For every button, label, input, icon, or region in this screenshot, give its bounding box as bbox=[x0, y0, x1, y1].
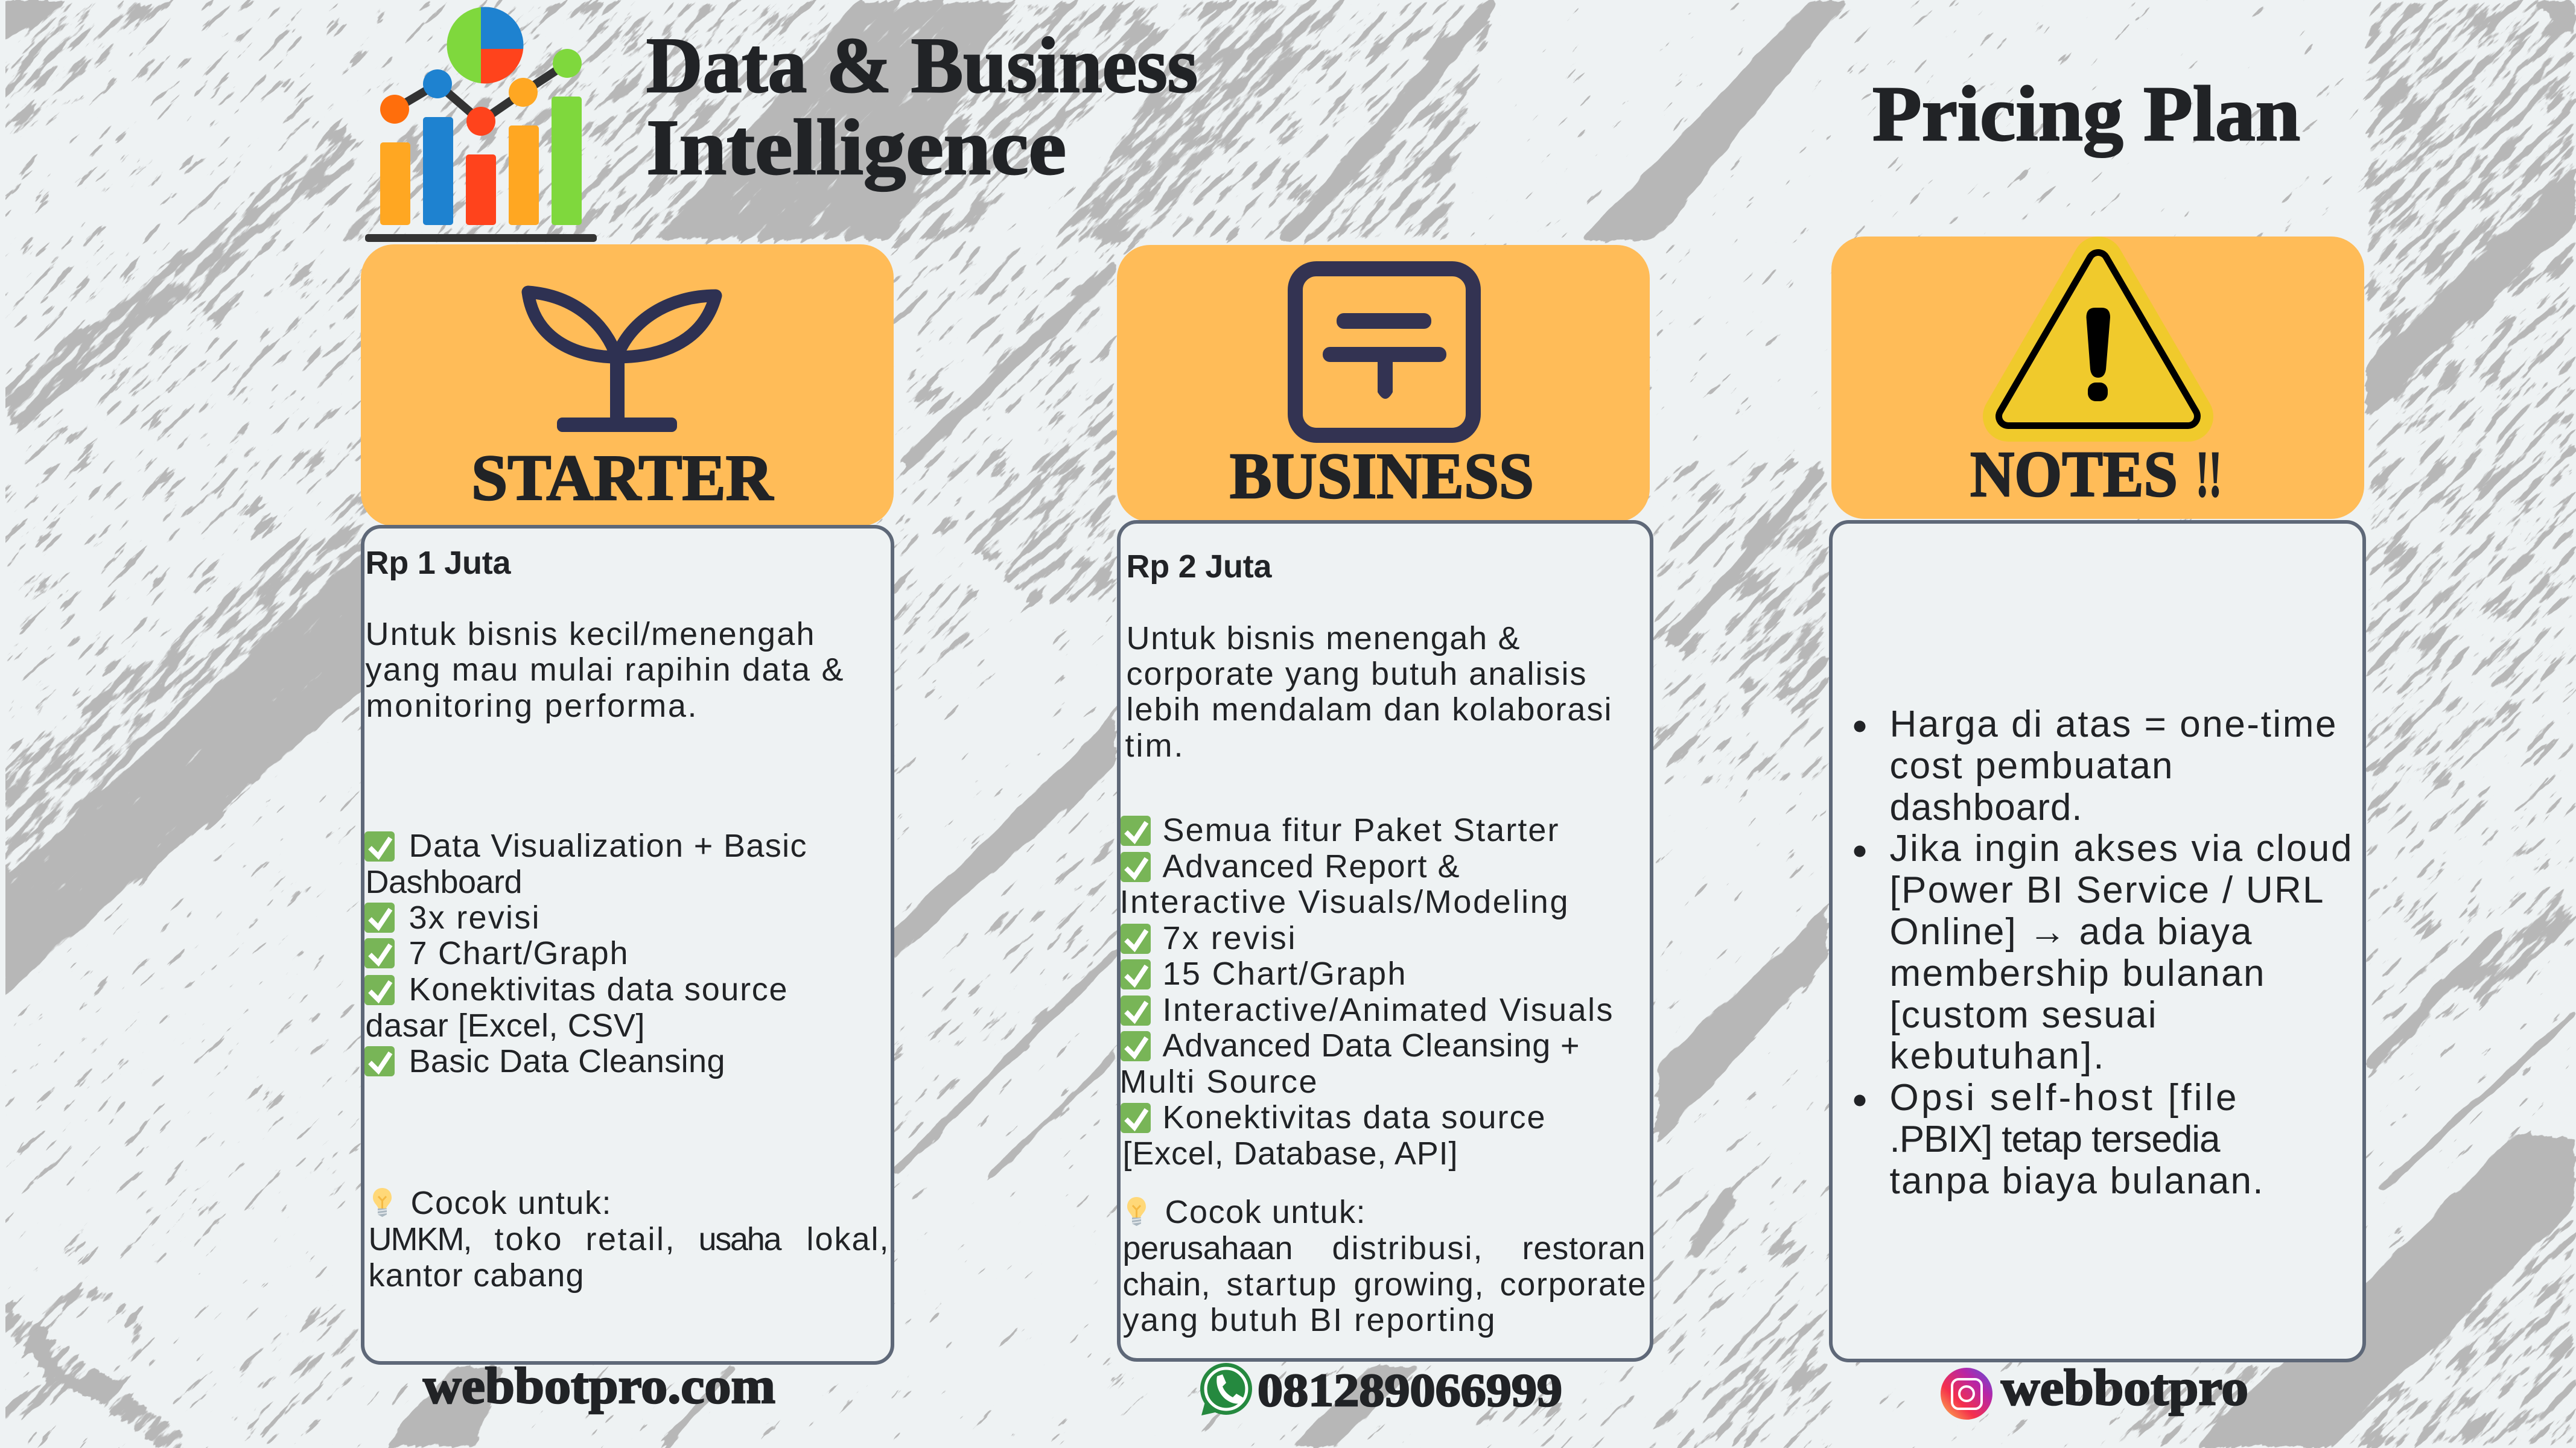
notes body card bbox=[1831, 522, 2364, 1361]
business description: Untuk bisnis menengah & bbox=[1126, 620, 1519, 656]
notes bullet list: cost pembuatan bbox=[1890, 745, 2172, 787]
business heading: BUSINESS bbox=[1230, 440, 1534, 512]
starter price: Rp 1 Juta bbox=[366, 545, 511, 581]
title bbox=[646, 22, 1198, 191]
notes heading: !! bbox=[2196, 439, 2222, 510]
business feature list: Interactive Visuals/Modeling bbox=[1120, 884, 1568, 920]
starter heading: STARTER bbox=[471, 442, 774, 514]
business feature list: Interactive/Animated Visuals bbox=[1162, 992, 1612, 1028]
notes bullet list: Opsi self-host [file bbox=[1890, 1077, 2236, 1119]
starter feature list: dasar [Excel, CSV] bbox=[366, 1008, 644, 1044]
business target audience: chain, bbox=[1122, 1266, 1210, 1303]
business feature list: Advanced Data Cleansing + bbox=[1162, 1027, 1580, 1064]
notes bullet list: [Power BI Service / URL bbox=[1890, 869, 2323, 911]
starter target audience: UMKM, bbox=[368, 1221, 472, 1257]
business feature list: Multi Source bbox=[1120, 1064, 1317, 1100]
business feature list: Semua fitur Paket Starter bbox=[1162, 812, 1559, 848]
starter description: Untuk bisnis kecil/menengah bbox=[366, 616, 815, 652]
notes bullet list: [custom sesuai bbox=[1890, 994, 2157, 1036]
starter description bbox=[366, 616, 844, 724]
footer: website: webbotpro.com bbox=[423, 1358, 775, 1414]
starter target audience bbox=[368, 1185, 888, 1294]
business feature list: Konektivitas data source bbox=[1162, 1099, 1545, 1135]
icon: warning triangle bbox=[2008, 262, 2188, 416]
title: Intelligence bbox=[646, 104, 1066, 191]
business description: corporate yang butuh analisis bbox=[1126, 656, 1586, 692]
notes bullet list: Harga di atas = one-time bbox=[1890, 703, 2336, 745]
icon: instagram bbox=[1941, 1368, 1992, 1420]
starter description: monitoring performa. bbox=[366, 688, 696, 724]
starter feature list: Dashboard bbox=[366, 864, 523, 900]
business description bbox=[1125, 620, 1611, 764]
icon: square with bars bbox=[1295, 269, 1474, 436]
heading: pricing plan: Pricing Plan bbox=[1872, 71, 2300, 157]
icon: sprout bbox=[528, 292, 716, 432]
notes bullet list: .PBIX] tetap tersedia bbox=[1890, 1119, 2221, 1160]
business feature list: [Excel, Database, API] bbox=[1122, 1135, 1458, 1172]
starter feature list bbox=[364, 828, 806, 1079]
notes bullet list: membership bulanan bbox=[1890, 953, 2264, 994]
starter target audience: lokal, bbox=[806, 1221, 888, 1257]
starter description: yang mau mulai rapihin data & bbox=[366, 652, 844, 688]
footer: whatsapp bbox=[1200, 1363, 1562, 1416]
business target audience: distribusi, bbox=[1332, 1230, 1482, 1266]
icon: whatsapp bbox=[1200, 1363, 1252, 1415]
business body card bbox=[1119, 522, 1652, 1360]
business price: Rp 2 Juta bbox=[1126, 548, 1272, 585]
panel: business bbox=[1117, 245, 1652, 1360]
business description: lebih mendalam dan kolaborasi bbox=[1126, 691, 1611, 728]
business target audience: restoran bbox=[1522, 1230, 1645, 1266]
logo: bar and line chart with pie bbox=[365, 0, 597, 242]
starter feature list: Konektivitas data source bbox=[409, 971, 787, 1008]
starter feature list: Basic Data Cleansing bbox=[409, 1043, 725, 1079]
instagram handle: webbotpro bbox=[2001, 1359, 2248, 1416]
notes bullet list bbox=[1854, 703, 2352, 1202]
business target audience: growing, bbox=[1354, 1266, 1483, 1303]
whatsapp number: 081289066999 bbox=[1258, 1364, 1562, 1416]
business feature list: 15 Chart/Graph bbox=[1162, 956, 1406, 992]
starter target audience: Cocok untuk: bbox=[410, 1185, 611, 1221]
business target audience: Cocok untuk: bbox=[1165, 1194, 1365, 1230]
starter target audience: kantor cabang bbox=[368, 1257, 584, 1294]
notes bullet list: Jika ingin akses via cloud bbox=[1890, 828, 2352, 869]
title: Data & Business bbox=[646, 22, 1198, 109]
business feature list bbox=[1120, 812, 1612, 1172]
notes heading: NOTES bbox=[1970, 439, 2178, 510]
panel: starter bbox=[361, 244, 894, 1363]
notes bullet list: Online] → ada biaya bbox=[1890, 911, 2252, 953]
business target audience: yang butuh BI reporting bbox=[1122, 1302, 1495, 1338]
starter feature list: 3x revisi bbox=[409, 900, 539, 936]
footer: instagram bbox=[1941, 1359, 2248, 1420]
business target audience: corporate bbox=[1500, 1266, 1646, 1303]
notes header background bbox=[1831, 237, 2364, 519]
business target audience: startup bbox=[1226, 1266, 1336, 1303]
business target audience: perusahaan bbox=[1122, 1230, 1293, 1266]
starter target audience: usaha bbox=[699, 1221, 782, 1257]
starter feature list: 7 Chart/Graph bbox=[409, 935, 628, 971]
starter feature list: Data Visualization + Basic bbox=[409, 828, 806, 864]
business header background bbox=[1117, 245, 1650, 522]
business description: tim. bbox=[1125, 728, 1183, 764]
notes bullet list: kebutuhan]. bbox=[1890, 1035, 2104, 1077]
starter body card bbox=[363, 527, 892, 1363]
starter target audience: retail, bbox=[585, 1221, 675, 1257]
starter target audience: toko bbox=[495, 1221, 561, 1257]
business target audience bbox=[1122, 1194, 1646, 1338]
starter header background bbox=[361, 244, 894, 526]
notes bullet list: dashboard. bbox=[1890, 787, 2082, 828]
panel: notes bbox=[1831, 237, 2364, 1361]
business feature list: Advanced Report & bbox=[1162, 848, 1459, 884]
notes bullet list: tanpa biaya bulanan. bbox=[1890, 1160, 2263, 1202]
business feature list: 7x revisi bbox=[1162, 920, 1295, 956]
